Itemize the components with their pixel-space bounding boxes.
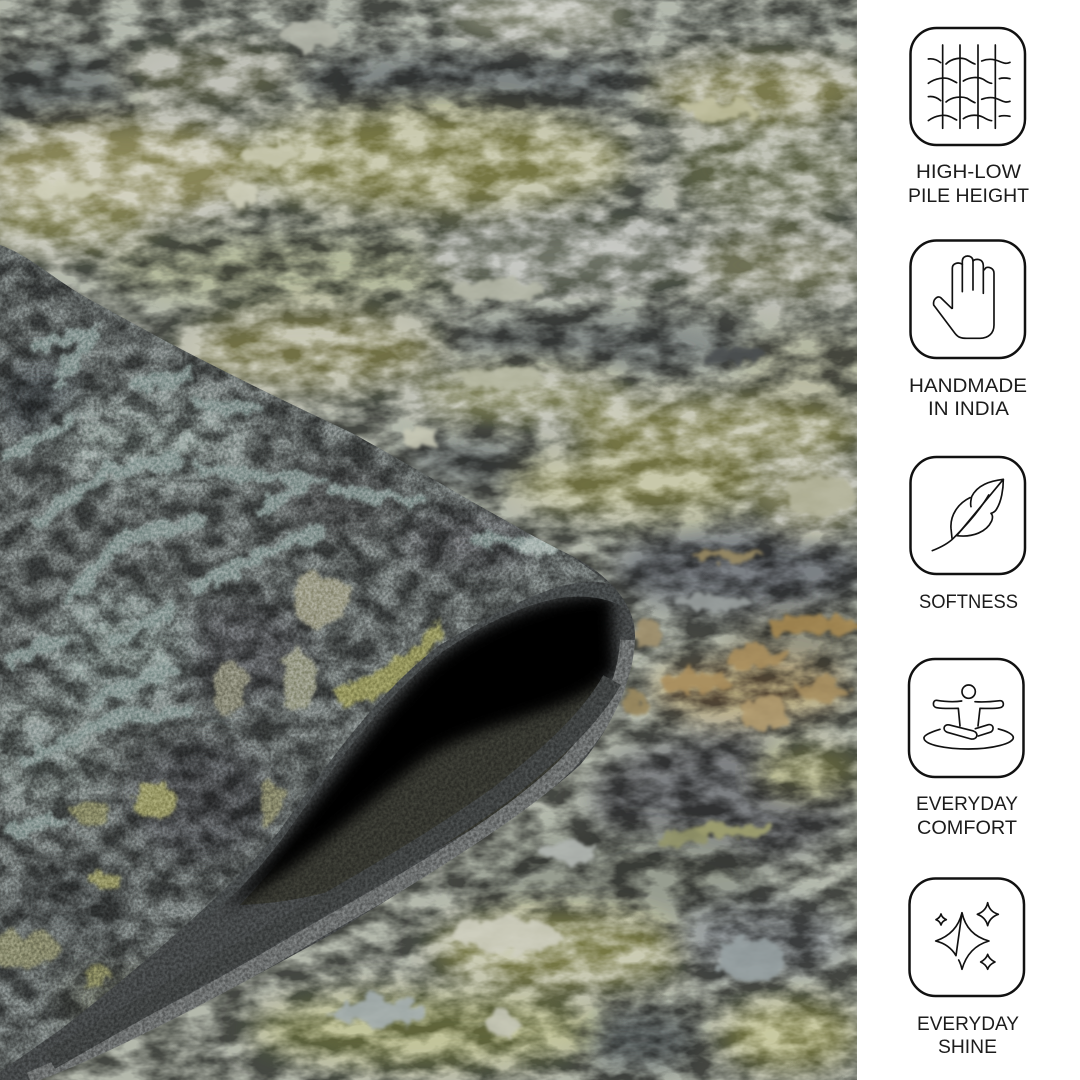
icon: hand	[934, 256, 994, 338]
label: handmade in india	[909, 375, 1027, 420]
rug binding edge	[30, 640, 628, 1080]
pale teal pile streaks	[10, 335, 555, 830]
icon frame: shine	[910, 878, 1024, 996]
icon frame: softness	[910, 457, 1025, 574]
icon: pile fibres	[928, 45, 1010, 128]
icon: seated figure	[924, 685, 1013, 749]
label: high-low pile height: PILE HEIGHT	[908, 185, 1029, 207]
cream and olive pile patches	[0, 535, 560, 989]
label: everyday comfort: COMFORT	[917, 817, 1017, 839]
inner binding shadow	[50, 680, 612, 1060]
feature: high-low pile height	[908, 28, 1029, 207]
underside woven backing	[240, 680, 600, 905]
label: handmade in india: HANDMADE	[909, 375, 1027, 397]
dark inner fold	[225, 595, 615, 910]
rug surface texture	[0, 240, 640, 1080]
highlight and gold patches	[30, 21, 860, 1037]
rug surface colour zones	[0, 360, 540, 1030]
label: softness: SOFTNESS	[919, 591, 1018, 613]
feature: everyday comfort	[909, 659, 1024, 839]
label: high-low pile height	[908, 161, 1029, 207]
icon: feather	[932, 479, 1003, 551]
feature: handmade in india	[909, 240, 1027, 420]
feature: softness	[910, 457, 1025, 613]
label: high-low pile height: HIGH-LOW	[916, 161, 1022, 183]
label: everyday shine: EVERYDAY	[917, 1013, 1019, 1035]
rug fibre grain	[0, 240, 640, 1080]
rolled rug	[0, 240, 640, 1080]
label: everyday shine	[917, 1013, 1019, 1058]
feature: everyday shine	[910, 878, 1024, 1058]
label: everyday shine: SHINE	[938, 1036, 997, 1058]
label: handmade in india: IN INDIA	[928, 398, 1009, 420]
floor rug base colour	[0, 0, 857, 1080]
label: everyday comfort: EVERYDAY	[916, 793, 1018, 815]
mottled pile texture	[0, 0, 857, 1080]
icon frame: comfort	[909, 659, 1024, 777]
icon: sparkles	[936, 903, 998, 969]
label: everyday comfort	[916, 793, 1018, 839]
panel: feature icons	[857, 0, 1080, 1080]
rug underside backing	[0, 240, 640, 1080]
white side panel	[857, 0, 1080, 1080]
icon frame: pile height	[910, 28, 1025, 145]
rug top surface	[0, 240, 640, 1080]
dark pile lip of the roll	[200, 590, 625, 915]
icon frame: handmade	[910, 240, 1025, 358]
rug surface base	[0, 240, 640, 1080]
